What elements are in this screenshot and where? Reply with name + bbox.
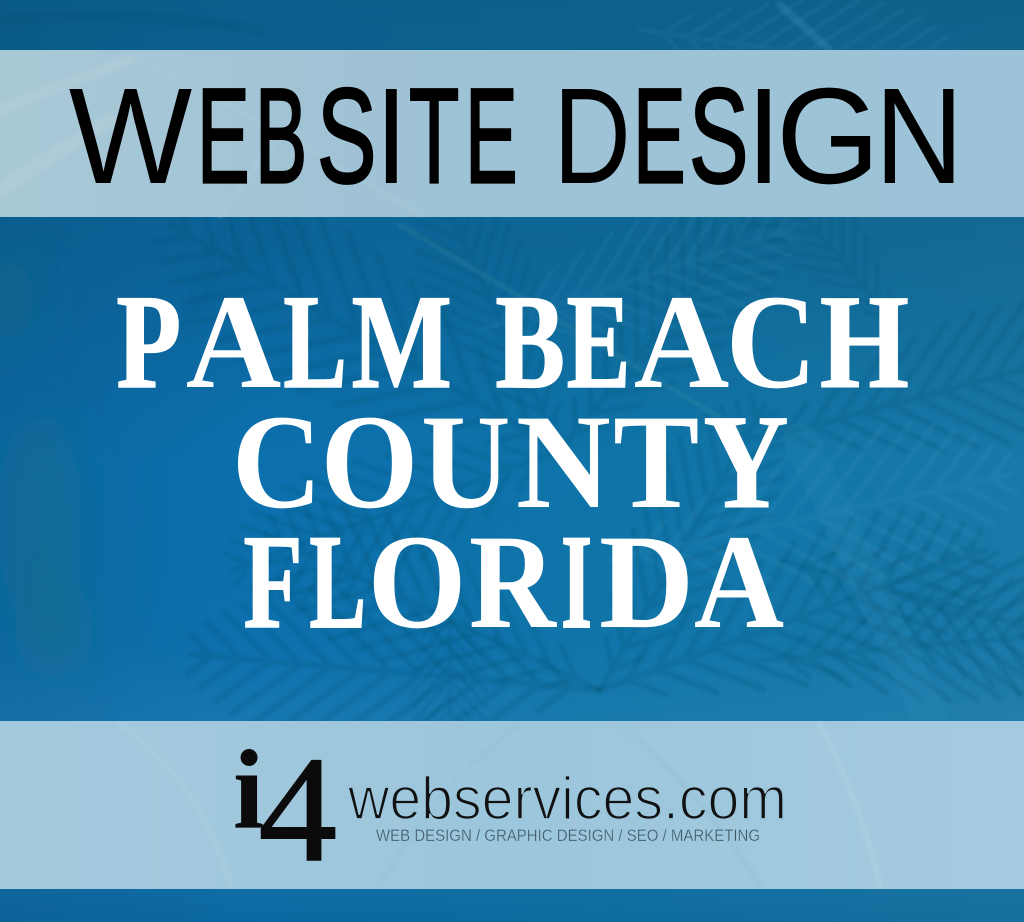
location line: florida: R [469, 507, 557, 657]
heading: website design: S [689, 61, 748, 212]
heading: website design [69, 59, 963, 213]
heading: website design: T [409, 60, 459, 211]
location line: county: C [232, 387, 322, 537]
top band frond texture [0, 60, 420, 215]
heading: website design: N [875, 59, 963, 212]
heading: website design: G [776, 60, 880, 212]
heading: website design: D [553, 61, 631, 213]
location line: palm beach: M [352, 268, 452, 417]
heading: location [116, 267, 909, 657]
location line: palm beach: B [495, 267, 565, 417]
location line: palm beach: P [116, 268, 181, 417]
heading: website design: W [69, 60, 192, 213]
location line: palm beach: A [186, 267, 281, 416]
heading: website design: I [746, 59, 781, 212]
location line: florida: O [368, 508, 466, 657]
location line: palm beach: H [820, 268, 909, 417]
top band [0, 50, 1024, 217]
heading: website design: I [375, 59, 407, 212]
heading: website design: E [633, 61, 686, 212]
heading: website design: E [197, 61, 250, 212]
location line: florida: L [309, 508, 366, 657]
location line: palm beach: A [634, 267, 729, 416]
location line: county [232, 386, 789, 537]
heading: website design: B [255, 61, 307, 212]
bottom band [0, 721, 1024, 889]
location line: florida: D [599, 507, 694, 656]
location line: palm beach [116, 267, 909, 417]
location line: florida: F [243, 508, 303, 657]
bottom band frond texture [120, 725, 880, 885]
location line: palm beach: E [566, 268, 631, 417]
location line: county: Y [703, 388, 789, 537]
location line: florida [243, 507, 784, 657]
location line: county: U [421, 387, 511, 537]
background: trees at left edge [0, 250, 95, 680]
logo tagline: WEB DESIGN / GRAPHIC DESIGN / SEO / MARKETING [376, 826, 760, 845]
heading: website design: S [317, 61, 376, 212]
palm trunk band and ribs [0, 5, 930, 720]
logo mark: i4: 4 [258, 727, 337, 893]
heading: website design: E [465, 61, 518, 212]
logo wordmark: webservices.com [347, 765, 787, 832]
location line: florida: I [561, 507, 592, 656]
location line: county: T [613, 386, 699, 537]
location line: county: O [321, 388, 418, 537]
logo: i4 webservices.com [233, 727, 787, 893]
location line: county: N [516, 386, 611, 536]
location line: florida: A [694, 508, 784, 657]
logo mark: i4: i [233, 728, 264, 853]
location line: palm beach: L [283, 268, 347, 417]
location line: palm beach: C [726, 268, 817, 417]
